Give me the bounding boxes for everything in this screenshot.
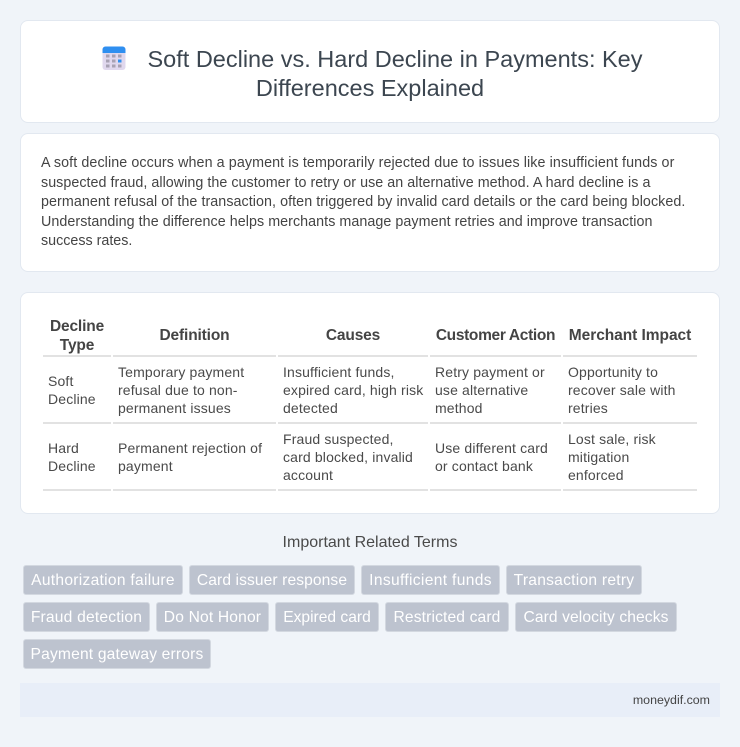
row: hard decline: card blocked, invalid xyxy=(283,449,413,465)
intro paragraph: Understanding the difference helps merchants manage payment retries and improve transaction xyxy=(41,214,652,230)
row: hard decline: Use different card xyxy=(435,440,548,456)
intro paragraph xyxy=(41,155,685,249)
row: soft decline: refusal due to non- xyxy=(118,382,238,398)
intro paragraph: permanent refusal of the transaction, often triggered by invalid card details or the card being blocked. xyxy=(41,194,685,210)
row: soft decline: Decline xyxy=(48,391,96,407)
row: soft decline: permanent issues xyxy=(118,400,231,416)
footer source text: moneydif.com xyxy=(633,693,710,707)
row: soft decline: method xyxy=(435,400,483,416)
row: soft decline xyxy=(48,364,676,416)
icon: calendar xyxy=(102,46,126,70)
panel: comparison table xyxy=(20,292,720,514)
intro paragraph: A soft decline occurs when a payment is temporarily rejected due to issues like insufficient funds or xyxy=(41,155,674,171)
footer bar xyxy=(20,683,720,717)
table header: Causes xyxy=(326,327,380,344)
row: hard decline: Lost sale, risk xyxy=(568,431,656,447)
row: hard decline: or contact bank xyxy=(435,458,533,474)
heading: related terms: Important Related Terms xyxy=(283,534,457,551)
row: soft decline: retries xyxy=(568,400,608,416)
panel: title card xyxy=(20,20,720,123)
related terms tags: Expired card xyxy=(283,609,371,626)
row: soft decline: expired card, high risk xyxy=(283,382,423,398)
row: hard decline: payment xyxy=(118,458,173,474)
row: hard decline: mitigation xyxy=(568,449,629,465)
panel: intro text xyxy=(20,133,720,272)
related terms tags: Authorization failure xyxy=(31,572,175,589)
intro paragraph: success rates. xyxy=(41,233,132,249)
row: soft decline: use alternative xyxy=(435,382,528,398)
row: soft decline: recover sale with xyxy=(568,382,676,398)
row: soft decline: Retry payment or xyxy=(435,364,545,380)
related terms tags xyxy=(23,565,677,669)
row: hard decline: Permanent rejection of xyxy=(118,440,262,456)
title: Soft Decline vs. Hard Decline in Payments: Key xyxy=(147,46,642,72)
table header: Customer Action xyxy=(436,327,555,344)
related terms tags: Transaction retry xyxy=(514,572,634,589)
table header: Merchant Impact xyxy=(569,327,691,344)
row: soft decline: Opportunity to xyxy=(568,364,658,380)
row: hard decline: Decline xyxy=(48,458,96,474)
row: hard decline: enforced xyxy=(568,467,624,483)
related terms tags: Card issuer response xyxy=(197,572,347,589)
table header: Definition xyxy=(160,327,229,344)
intro paragraph: suspected fraud, allowing the customer to retry or use an alternative method. A hard decline is a xyxy=(41,174,650,190)
row: hard decline xyxy=(48,431,656,483)
row: soft decline: Soft xyxy=(48,373,74,389)
table header: Type xyxy=(60,337,94,354)
related terms tags: Card velocity checks xyxy=(524,609,668,626)
row: hard decline: Fraud suspected, xyxy=(283,431,394,447)
row: soft decline: detected xyxy=(283,400,338,416)
row: hard decline: Hard xyxy=(48,440,79,456)
related terms tags: Payment gateway errors xyxy=(31,646,203,663)
related terms tags: Restricted card xyxy=(394,609,500,626)
row: soft decline: Insufficient funds, xyxy=(283,364,395,380)
title: Differences Explained xyxy=(256,75,484,101)
related terms tags: Do Not Honor xyxy=(164,609,261,626)
related terms tags: Fraud detection xyxy=(31,609,142,626)
related terms tags: Insufficient funds xyxy=(369,572,492,589)
table header: Decline xyxy=(50,318,104,335)
table header xyxy=(50,318,692,354)
row: hard decline: account xyxy=(283,467,333,483)
row: soft decline: Temporary payment xyxy=(118,364,244,380)
title xyxy=(147,46,642,101)
